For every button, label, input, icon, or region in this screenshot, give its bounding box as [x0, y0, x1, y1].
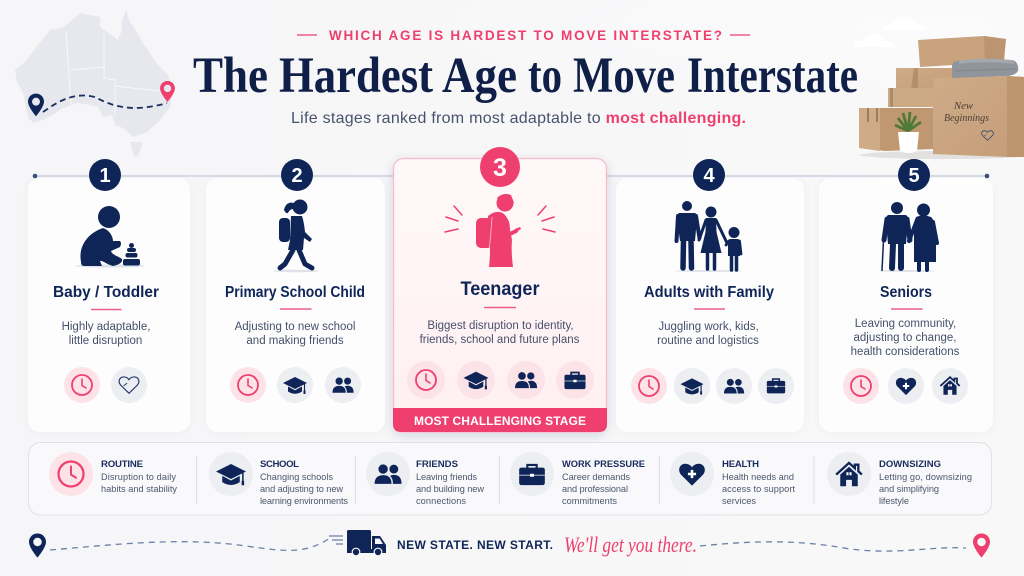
- panel: seniors: [819, 159, 993, 432]
- banner: most challenging stage: MOST CHALLENGING STAGE: [414, 414, 586, 428]
- footer slogan: NEW STATE. NEW START.: [397, 538, 553, 552]
- icon: clock: [64, 367, 100, 403]
- legend item: school: SCHOOL: [260, 459, 299, 470]
- icon: school child: [273, 200, 319, 272]
- legend item: school: Changing schools: [260, 472, 333, 482]
- legend item: routine: habits and stability: [101, 484, 177, 494]
- legend item: routine: [49, 452, 177, 496]
- stage description: [851, 318, 960, 358]
- legend item: health: access to support: [722, 484, 795, 494]
- icon: heart: [111, 367, 147, 403]
- number badge 5: 5: [908, 165, 920, 187]
- icon: heart on box: [982, 131, 993, 140]
- legend item: downsizing: DOWNSIZING: [879, 459, 941, 470]
- number badge 4: [693, 159, 725, 191]
- number badge 2: [281, 159, 313, 191]
- stage description: adjusting to change,: [854, 332, 956, 344]
- box label: Beginnings: [944, 113, 989, 124]
- legend item: friends: [366, 452, 484, 506]
- box label: New: [953, 101, 973, 112]
- legend item: health: HEALTH: [722, 459, 759, 470]
- panel: teenager (highlighted): [393, 147, 607, 432]
- legend item: work pressure: [510, 452, 646, 506]
- panel: primary school child: [206, 159, 385, 432]
- legend item: school: and adjusting to new: [260, 484, 343, 494]
- legend item: friends: connections: [416, 496, 466, 506]
- stage description: Leaving community,: [855, 318, 956, 330]
- kicker heading: WHICH AGE IS HARDEST TO MOVE INTERSTATE?: [329, 28, 722, 43]
- icon: clock: [407, 361, 445, 399]
- icon: start pin: [29, 533, 46, 558]
- stage description: [62, 321, 150, 347]
- legend item: health: Health needs and: [722, 472, 794, 482]
- title: [193, 48, 858, 104]
- stage title: Baby / Toddler: [53, 284, 159, 301]
- stage title: Teenager: [460, 279, 540, 300]
- icon: house: [932, 368, 968, 404]
- title: Age: [442, 48, 517, 104]
- icon: clock: [843, 368, 879, 404]
- number badge 4: 4: [703, 165, 715, 187]
- number badge 5: [898, 159, 930, 191]
- icon: briefcase: [556, 361, 594, 399]
- timeline line: [33, 174, 989, 178]
- icon: delivery truck: [329, 530, 386, 556]
- legend item: school: learning environments: [260, 496, 348, 506]
- icon: destination pin: [160, 81, 175, 102]
- icon: heart plus: [888, 368, 924, 404]
- stage description: and making friends: [246, 335, 344, 347]
- legend item: school: [209, 452, 348, 506]
- stage description: [235, 321, 355, 347]
- icon: graduation cap: [674, 368, 710, 404]
- moving boxes with plant: [859, 36, 1024, 159]
- legend item: health: [670, 452, 795, 506]
- clouds: [854, 16, 927, 47]
- legend item: friends: and building new: [416, 484, 484, 494]
- stage description: Juggling work, kids,: [658, 321, 759, 333]
- number badge 1: [89, 159, 121, 191]
- stage description: routine and logistics: [657, 335, 759, 347]
- stage description: Biggest disruption to identity,: [427, 320, 574, 332]
- subtitle: Life stages ranked from most adaptable to most challenging.: [291, 110, 746, 127]
- stage description: [657, 321, 759, 347]
- panel: adults with family: [616, 159, 804, 432]
- icon: destination pin: [973, 533, 990, 558]
- title: to: [528, 48, 562, 104]
- legend item: downsizing: lifestyle: [879, 496, 909, 506]
- legend item: work pressure: commitments: [562, 496, 617, 506]
- legend item: work pressure: and professional: [562, 484, 628, 494]
- stage description: [420, 320, 580, 346]
- legend item: downsizing: and simplifying: [879, 484, 939, 494]
- icon: friends: [716, 368, 752, 404]
- icon: clock: [631, 368, 667, 404]
- icon: clock: [230, 367, 266, 403]
- icon: baby with toy: [75, 206, 145, 268]
- stage description: friends, school and future plans: [420, 334, 580, 346]
- number badge 2: 2: [291, 165, 303, 187]
- footer script tagline: We'll get you there.: [564, 532, 697, 557]
- legend item: health: services: [722, 496, 756, 506]
- banner: most challenging stage: [393, 408, 607, 432]
- icon: seniors: [879, 202, 937, 272]
- stage description: Adjusting to new school: [235, 321, 355, 333]
- panel: legend: [28, 442, 992, 515]
- title: The: [193, 48, 268, 104]
- icon: teenager with phone: [445, 194, 555, 267]
- legend item: friends: Leaving friends: [416, 472, 477, 482]
- stage description: little disruption: [69, 335, 142, 347]
- number badge 3: 3: [493, 154, 507, 182]
- legend item: downsizing: Letting go, downsizing: [879, 472, 972, 482]
- legend item: routine: Disruption to daily: [101, 472, 176, 482]
- title: Interstate: [687, 48, 858, 104]
- legend item: downsizing: [827, 452, 972, 506]
- icon: family: [675, 201, 743, 272]
- legend item: friends: FRIENDS: [416, 459, 459, 470]
- stage title: Seniors: [880, 284, 932, 301]
- icon: briefcase: [758, 368, 794, 404]
- legend item: routine: ROUTINE: [101, 459, 144, 470]
- stage description: health considerations: [851, 346, 960, 358]
- title: Move: [573, 48, 675, 104]
- number badge 3: [480, 147, 520, 187]
- number badge 1: 1: [99, 165, 111, 187]
- icon: friends: [507, 361, 545, 399]
- stage description: Highly adaptable,: [62, 321, 150, 333]
- legend item: work pressure: Career demands: [562, 472, 630, 482]
- map of Australia with route: [15, 10, 175, 157]
- icon: friends: [325, 367, 361, 403]
- stage title: Adults with Family: [644, 284, 774, 301]
- footer route: [29, 533, 990, 558]
- icon: start pin: [28, 94, 44, 116]
- stage title: Primary School Child: [225, 284, 365, 301]
- title: Hardest: [279, 48, 433, 104]
- icon: graduation cap: [457, 361, 495, 399]
- icon: graduation cap: [277, 367, 313, 403]
- panel: baby / toddler: [28, 159, 190, 432]
- legend item: work pressure: WORK PRESSURE: [562, 459, 646, 470]
